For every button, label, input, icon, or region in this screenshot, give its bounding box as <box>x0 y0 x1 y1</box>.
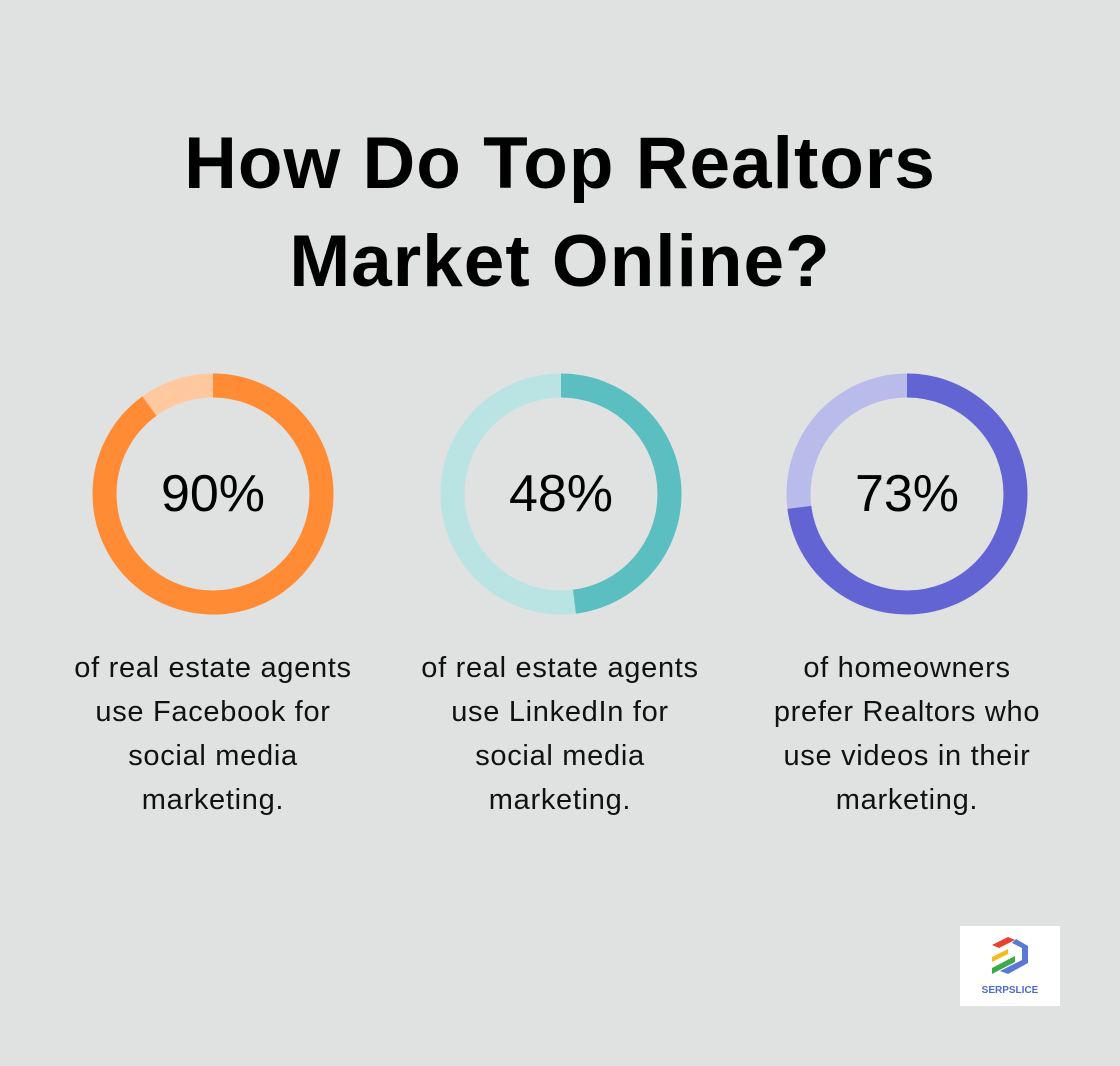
text: 90% caption: use Facebook for <box>95 696 331 728</box>
logo: serpslice <box>960 926 1060 1006</box>
text: 73% caption: marketing. <box>836 784 978 816</box>
title <box>184 123 936 302</box>
donut: 73% <box>786 374 1028 614</box>
text: 48% caption: marketing. <box>489 784 631 816</box>
text: 90% caption: social media <box>128 740 298 772</box>
donut: 73%: 73% <box>855 465 959 523</box>
logo: serpslice: SERPSLICE <box>982 985 1039 996</box>
text: 90% caption: of real estate agents <box>74 652 352 684</box>
text: 48% caption: social media <box>475 740 645 772</box>
text: 73% caption: use videos in their <box>783 740 1031 772</box>
text: 48% caption <box>421 652 699 816</box>
text: 90% caption: marketing. <box>142 784 284 816</box>
donut: 90%: 90% <box>161 465 265 523</box>
donut: 48% <box>440 374 682 614</box>
text: 90% caption <box>74 652 352 816</box>
title: Market Online? <box>289 221 831 302</box>
text: 73% caption: prefer Realtors who <box>774 696 1040 728</box>
text: 48% caption: of real estate agents <box>421 652 699 684</box>
text: 73% caption: of homeowners <box>803 652 1011 684</box>
text: 73% caption <box>774 652 1040 816</box>
title: How Do Top Realtors <box>184 123 936 204</box>
donut: 48%: 48% <box>509 465 613 523</box>
text: 48% caption: use LinkedIn for <box>451 696 669 728</box>
donut: 90% <box>92 374 334 614</box>
